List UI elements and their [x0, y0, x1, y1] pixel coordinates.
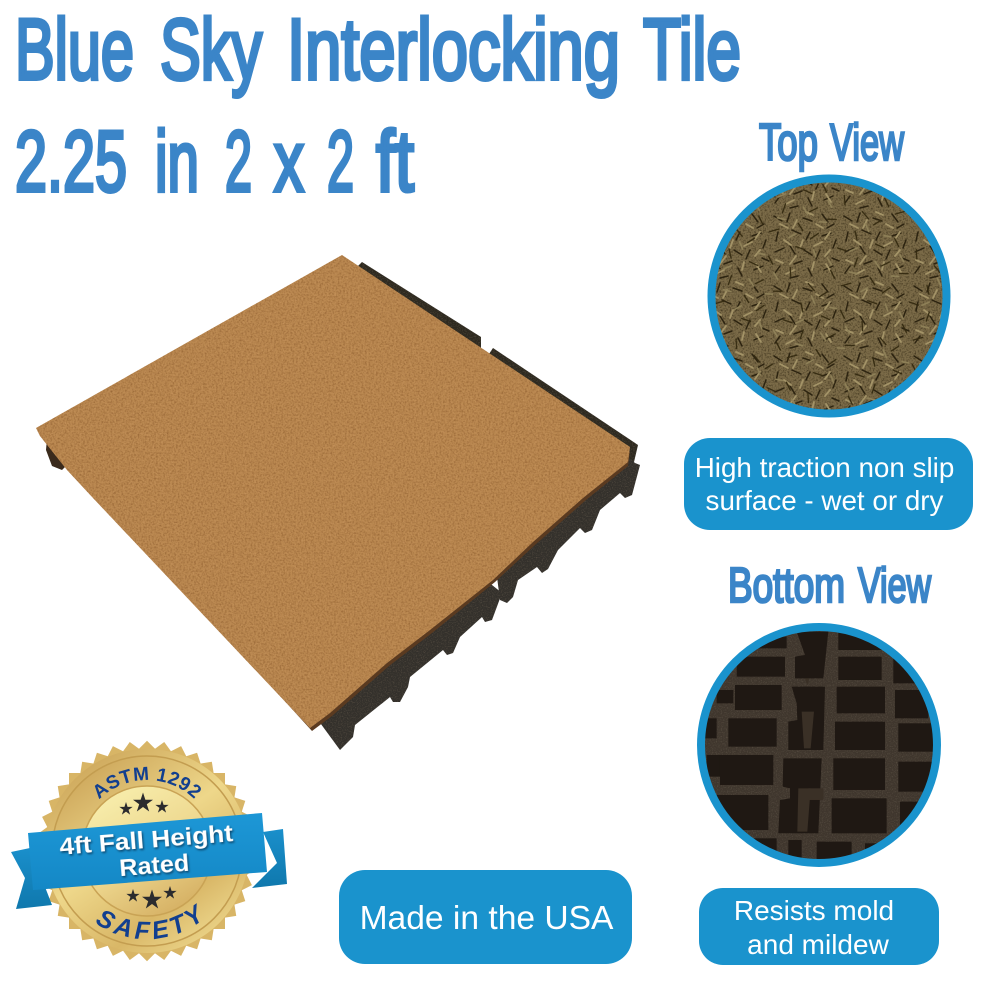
title: Tile — [643, 2, 741, 98]
callout: traction: surface - wet or dry — [706, 485, 944, 516]
bottom view circle — [695, 620, 945, 870]
title: 2 — [327, 114, 354, 210]
callout: mold: and mildew — [747, 929, 890, 960]
badge: safety seal — [11, 740, 287, 962]
callout: mold — [699, 888, 939, 965]
badge: safety seal: SAFETY — [96, 903, 199, 940]
title: x — [274, 114, 304, 210]
top view circle — [705, 172, 953, 420]
callout: made in the USA — [339, 870, 632, 964]
callout: traction — [684, 438, 973, 530]
callout: mold: Resists mold — [734, 895, 894, 926]
heading: bottom view: Bottom — [728, 559, 845, 613]
callout: made in the USA: Made in the USA — [360, 900, 614, 937]
title: Sky — [160, 2, 262, 98]
title: Blue — [15, 2, 134, 98]
title: Interlocking — [287, 2, 620, 98]
callout: traction: High traction non slip — [695, 452, 954, 483]
heading: top view — [759, 114, 904, 172]
title: ft — [376, 114, 414, 210]
title: in — [155, 114, 199, 210]
badge: safety seal: Rated — [118, 850, 190, 882]
title: 2 — [225, 114, 252, 210]
title: 2.25 — [15, 114, 127, 210]
heading: top view: Top — [759, 114, 818, 172]
title — [15, 2, 741, 210]
product image: rubber tile — [36, 255, 640, 750]
heading: bottom view: View — [858, 559, 931, 613]
badge: safety seal: ASTM 1292 — [94, 766, 201, 800]
badge: safety seal: 4ft Fall Height — [58, 820, 234, 861]
heading: top view: View — [830, 114, 904, 172]
